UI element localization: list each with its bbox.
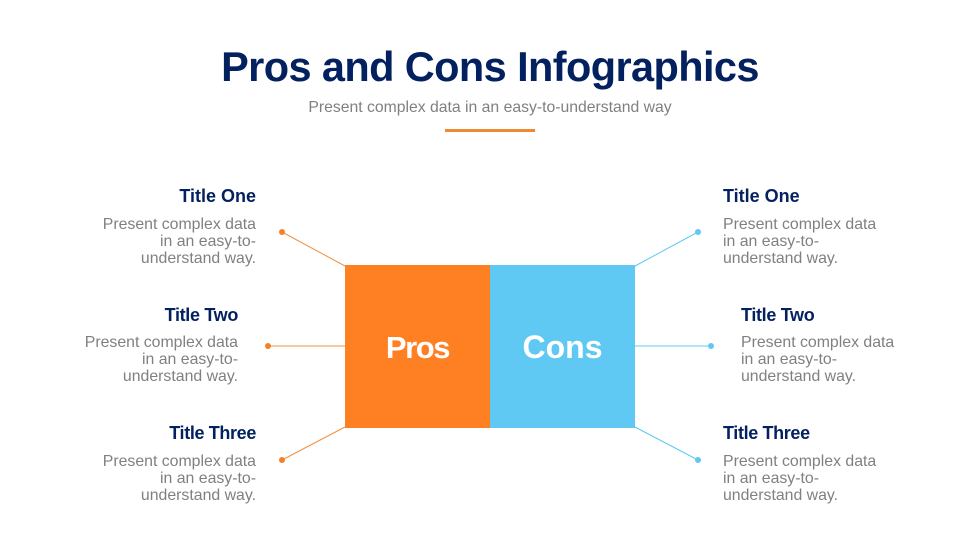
pros item one: Title One bbox=[179, 186, 256, 206]
cons item three: understand way. bbox=[723, 487, 838, 504]
pros item two bbox=[85, 305, 238, 385]
pros item two: in an easy-to- bbox=[142, 351, 238, 368]
pros item three bbox=[103, 423, 256, 504]
pros item three: Title Three bbox=[169, 423, 256, 443]
pros item two: understand way. bbox=[123, 368, 238, 385]
cons item three bbox=[723, 423, 876, 504]
pros item one: in an easy-to- bbox=[160, 233, 256, 250]
cons item two: understand way. bbox=[741, 368, 856, 385]
cons item two: in an easy-to- bbox=[741, 351, 837, 368]
cons box: Cons bbox=[522, 329, 602, 365]
pros item three: in an easy-to- bbox=[160, 470, 256, 487]
cons item one bbox=[723, 186, 876, 267]
cons item three: in an easy-to- bbox=[723, 470, 819, 487]
cons item two: Title Two bbox=[741, 305, 814, 325]
cons item one: Present complex data bbox=[723, 216, 876, 233]
pros box: Pros bbox=[386, 330, 449, 365]
pros item three: understand way. bbox=[141, 487, 256, 504]
pros item two: Present complex data bbox=[85, 334, 238, 351]
cons item one: in an easy-to- bbox=[723, 233, 819, 250]
pros item one: Present complex data bbox=[103, 216, 256, 233]
pros item one bbox=[103, 186, 256, 267]
title: Pros and Cons Infographics bbox=[221, 43, 759, 90]
pros item three: Present complex data bbox=[103, 453, 256, 470]
cons item three: Present complex data bbox=[723, 453, 876, 470]
pros item two: Title Two bbox=[165, 305, 238, 325]
pros item one: understand way. bbox=[141, 250, 256, 267]
cons item one: understand way. bbox=[723, 250, 838, 267]
cons item two: Present complex data bbox=[741, 334, 894, 351]
cons item one: Title One bbox=[723, 186, 800, 206]
title underline bbox=[445, 129, 535, 132]
cons box bbox=[490, 265, 635, 428]
cons item three: Title Three bbox=[723, 423, 810, 443]
cons item two bbox=[741, 305, 894, 385]
subtitle: Present complex data in an easy-to-understand way bbox=[308, 99, 672, 116]
pros box bbox=[345, 265, 490, 428]
